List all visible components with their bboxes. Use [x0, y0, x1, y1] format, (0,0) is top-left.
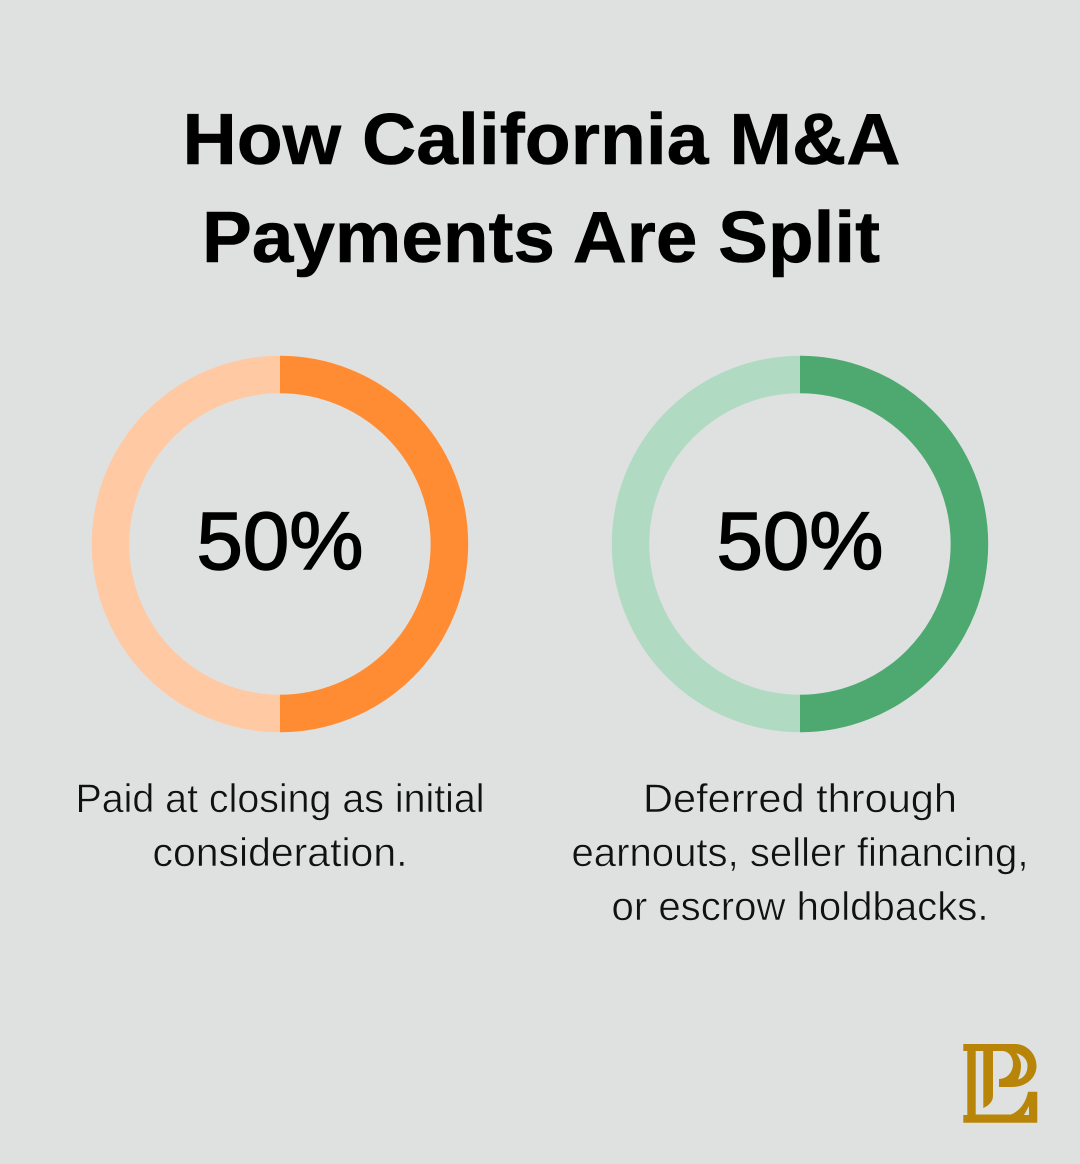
- icon: PL monogram logo: [963, 1044, 1037, 1123]
- panel: paid at closing: [76, 374, 484, 875]
- donut chart: green 50%: [630, 374, 970, 714]
- green description: or escrow holdbacks.: [612, 885, 988, 929]
- green description: Deferred through: [643, 777, 957, 821]
- green percentage: 50%: [716, 496, 884, 587]
- green description: earnouts, seller financing,: [572, 831, 1028, 875]
- green description: [572, 777, 1028, 929]
- title: How California M&A: [182, 100, 901, 180]
- title: Payments Are Split: [202, 198, 880, 278]
- orange percentage: 50%: [196, 496, 364, 587]
- panel: deferred: [572, 374, 1028, 929]
- title: [182, 100, 901, 278]
- donut chart: orange 50%: [110, 374, 450, 714]
- orange description: Paid at closing as initial: [76, 777, 484, 821]
- orange description: [76, 777, 484, 875]
- orange description: consideration.: [152, 831, 408, 875]
